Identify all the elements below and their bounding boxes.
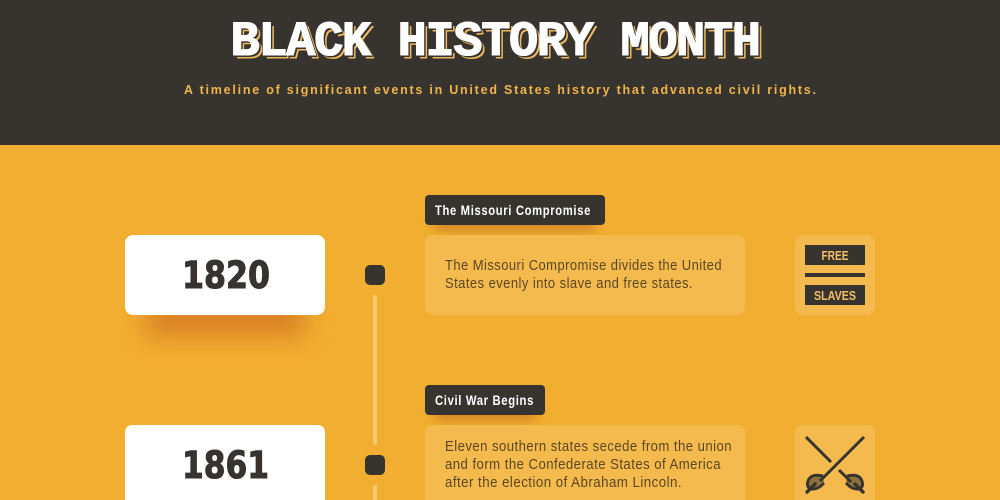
description panel 1861: and form the Confederate States of America	[445, 457, 721, 473]
year card 1861: 1861	[182, 444, 269, 487]
year card 1861	[125, 425, 325, 500]
description panel 1861: Eleven southern states secede from the union	[445, 439, 732, 455]
timeline marker 1820	[365, 265, 385, 285]
title: BLACK HISTORY MONTH	[230, 14, 760, 70]
year card 1820: 1820	[182, 254, 270, 297]
heading: The Missouri Compromise: The Missouri Compromise	[435, 202, 591, 218]
heading: Civil War Begins: Civil War Begins	[435, 392, 534, 408]
icon: free and slaves states: SLAVES	[814, 288, 856, 303]
heading: Civil War Begins	[425, 385, 545, 420]
timeline line	[373, 295, 377, 500]
description panel 1861	[425, 425, 745, 500]
event: 1820	[125, 195, 875, 336]
heading: The Missouri Compromise	[425, 195, 605, 230]
event: 1861	[125, 385, 875, 500]
timeline marker 1861	[365, 455, 385, 475]
subtitle: A timeline of significant events in United States history that advanced civil rights.	[184, 83, 816, 97]
icon: free and slaves states: FREE	[822, 248, 849, 263]
icon: crossed swords	[795, 425, 875, 500]
description panel 1861: after the election of Abraham Lincoln.	[445, 475, 682, 491]
description panel 1820	[425, 235, 745, 315]
description panel 1820: States evenly into slave and free states.	[445, 276, 693, 292]
year card 1820	[125, 235, 325, 336]
icon: free and slaves states	[795, 235, 875, 315]
header band	[0, 0, 1000, 145]
description panel 1820: The Missouri Compromise divides the United	[445, 258, 722, 274]
